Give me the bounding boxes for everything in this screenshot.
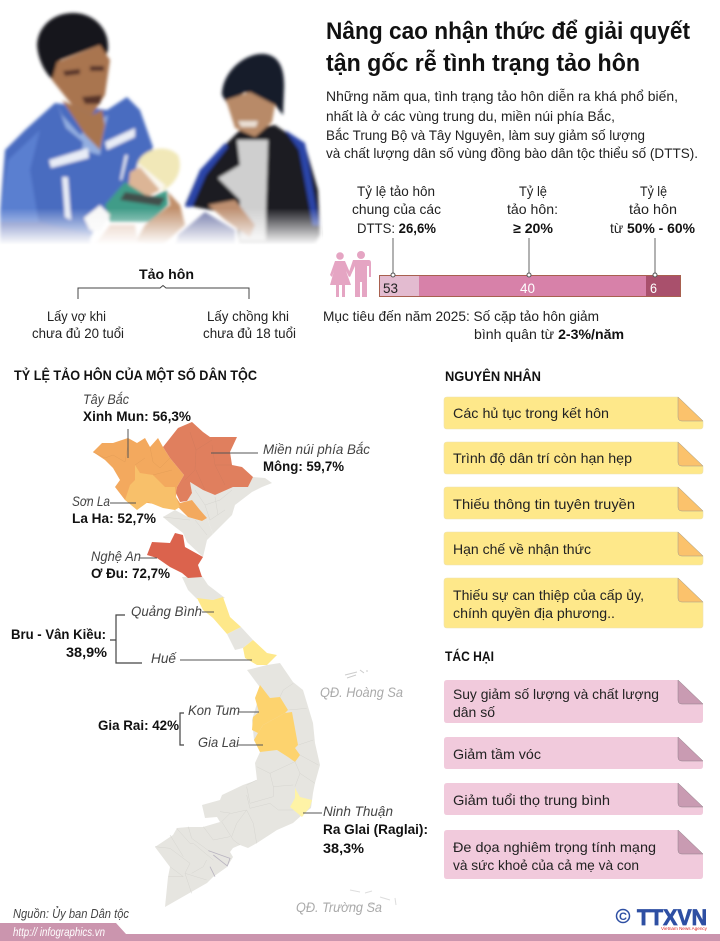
logo: TTXVN: TTXVN: [637, 905, 707, 930]
icon: couple: [330, 251, 371, 297]
target 2025: Mục tiêu đến năm 2025: Số cặp tảo hôn giảm: [323, 308, 599, 324]
definition: tảo hôn: Lấy chồng khi: [207, 308, 289, 324]
intro paragraph: Những năm qua, tình trạng tảo hôn diễn ra khá phổ biến,: [326, 88, 678, 104]
label: Trường Sa islands: [296, 890, 396, 915]
label: Hoàng Sa islands: QĐ. Hoàng Sa: [320, 684, 403, 700]
label: Bru - Vân Kiều: Huế: [151, 650, 177, 666]
harm note 2: Giảm tầm vóc: [453, 746, 541, 762]
label: Tây Bắc: Tây Bắc: [83, 391, 129, 407]
label: Hoàng Sa islands: [320, 670, 403, 700]
harm note 4: Đe dọa nghiêm trọng tính mạng: [453, 839, 656, 855]
harm note 1: dân số: [453, 704, 495, 720]
harm note 2: [444, 737, 703, 769]
stat: 20 percent: [507, 183, 558, 236]
harm note 1: [444, 680, 703, 723]
label: Ninh Thuận: Ra Glai (Raglai):: [323, 821, 428, 837]
cause note 2: [444, 442, 703, 474]
label: Sơn La: La Ha: 52,7%: [72, 510, 157, 526]
heading: causes: NGUYÊN NHÂN: [445, 367, 541, 384]
definition: tảo hôn: Lấy vợ khi: [47, 308, 106, 324]
harm note 3: Giảm tuổi thọ trung bình: [453, 792, 610, 808]
map of Vietnam: [93, 422, 320, 907]
intro paragraph: nhất là ở các vùng trung du, miền núi phía Bắc,: [326, 108, 615, 124]
cause note 4: [444, 532, 703, 565]
label: Miền núi phía Bắc: Mông: 59,7%: [263, 458, 345, 474]
map heading: TỶ LỆ TẢO HÔN CỦA MỘT SỐ DÂN TỘC: [14, 366, 257, 383]
label: Tây Bắc: [83, 391, 192, 458]
cause note 1: Các hủ tục trong kết hôn: [453, 405, 609, 421]
harm note 3: [444, 783, 703, 815]
definition: tảo hôn: Tảo hôn: [139, 266, 194, 282]
label: Bru - Vân Kiều: [11, 603, 252, 666]
stat: overall rate: [352, 183, 441, 236]
definition: tảo hôn: [32, 266, 296, 341]
stacked bar: 6: [650, 280, 657, 296]
label: Ninh Thuận: Ninh Thuận: [323, 803, 393, 819]
photo: young couple with baby: [0, 13, 322, 254]
stat: 50 to 60 percent: từ 50% - 60%: [610, 220, 696, 236]
stat: 50 to 60 percent: tảo hôn: [629, 201, 677, 217]
definition: tảo hôn: chưa đủ 18 tuổi: [203, 325, 296, 341]
harm note 4: [444, 830, 703, 879]
stacked bar: [380, 238, 680, 296]
stat: 20 percent: Tỷ lệ: [519, 183, 547, 199]
title: [326, 18, 690, 77]
stat: 50 to 60 percent: Tỷ lệ: [640, 183, 667, 199]
stat: 20 percent: tảo hôn:: [507, 201, 558, 217]
title: Nâng cao nhận thức để giải quyết: [326, 18, 690, 45]
cause note 5: chính quyền địa phương..: [453, 605, 615, 621]
title: tận gốc rễ tình trạng tảo hôn: [326, 49, 640, 77]
label: Gia Rai: Kon Tum: [188, 702, 240, 718]
heading: harms: TÁC HẠI: [445, 648, 494, 664]
label: Gia Rai: Gia Rai: 42%: [98, 717, 180, 733]
source: Nguồn: Ủy ban Dân tộc: [13, 906, 130, 921]
label: Gia Rai: [98, 702, 263, 750]
cause note 3: Thiếu thông tin tuyên truyền: [453, 496, 635, 512]
cause note 2: Trình độ dân trí còn hạn hẹp: [453, 450, 632, 466]
label: Ninh Thuận: 38,3%: [323, 840, 365, 856]
label: Bru - Vân Kiều: Bru - Vân Kiều:: [11, 626, 106, 642]
stat: 20 percent: ≥ 20%: [513, 220, 554, 236]
stat: overall rate: Tỷ lệ tảo hôn: [357, 183, 435, 199]
footer band: http:// infographics.vn: [13, 925, 105, 939]
cause note 4: Hạn chế về nhận thức: [453, 541, 591, 557]
stacked bar: 40: [520, 280, 535, 296]
harm note 1: Suy giảm số lượng và chất lượng: [453, 686, 659, 702]
intro paragraph: và chất lượng dân số vùng đồng bào dân tộc thiểu số (DTTS).: [326, 145, 698, 161]
stat: overall rate: DTTS: 26,6%: [357, 220, 437, 236]
target 2025: [323, 308, 624, 342]
intro paragraph: [326, 88, 698, 161]
label: Sơn La: Sơn La: [72, 493, 110, 509]
label: Gia Rai: Gia Lai: [198, 734, 240, 750]
label: Tây Bắc: Xinh Mun: 56,3%: [83, 408, 192, 424]
logo: TTXVN: Vietnam News Agency: [661, 926, 708, 931]
stacked bar: 53: [383, 280, 398, 296]
label: Bru - Vân Kiều: Quảng Bình: [131, 603, 202, 619]
logo: TTXVN: C: [619, 911, 627, 923]
label: Nghệ An: [91, 548, 171, 581]
label: Miền núi phía Bắc: [211, 441, 370, 474]
stat: overall rate: chung của các: [352, 201, 441, 217]
definition: tảo hôn: chưa đủ 20 tuổi: [32, 325, 124, 341]
label: Nghệ An: Nghệ An: [91, 548, 141, 564]
cause note 5: Thiếu sự can thiệp của cấp ủy,: [453, 587, 644, 603]
label: Nghệ An: Ơ Đu: 72,7%: [91, 565, 171, 581]
label: Bru - Vân Kiều: 38,9%: [66, 644, 108, 660]
stat: 50 to 60 percent: [610, 183, 696, 236]
harm note 4: và sức khoẻ của cả mẹ và con: [453, 857, 639, 873]
label: Miền núi phía Bắc: Miền núi phía Bắc: [263, 441, 370, 457]
footer band: [0, 923, 720, 941]
cause note 1: [444, 397, 703, 429]
label: Trường Sa islands: QĐ. Trường Sa: [296, 899, 382, 915]
target 2025: bình quân từ 2-3%/năm: [474, 326, 624, 342]
cause note 5: [444, 578, 703, 628]
label: Ninh Thuận: [303, 803, 428, 856]
intro paragraph: Bắc Trung Bộ và Tây Nguyên, làm suy giảm số lượng: [326, 127, 645, 143]
cause note 3: [444, 487, 703, 519]
label: Sơn La: [72, 493, 157, 526]
